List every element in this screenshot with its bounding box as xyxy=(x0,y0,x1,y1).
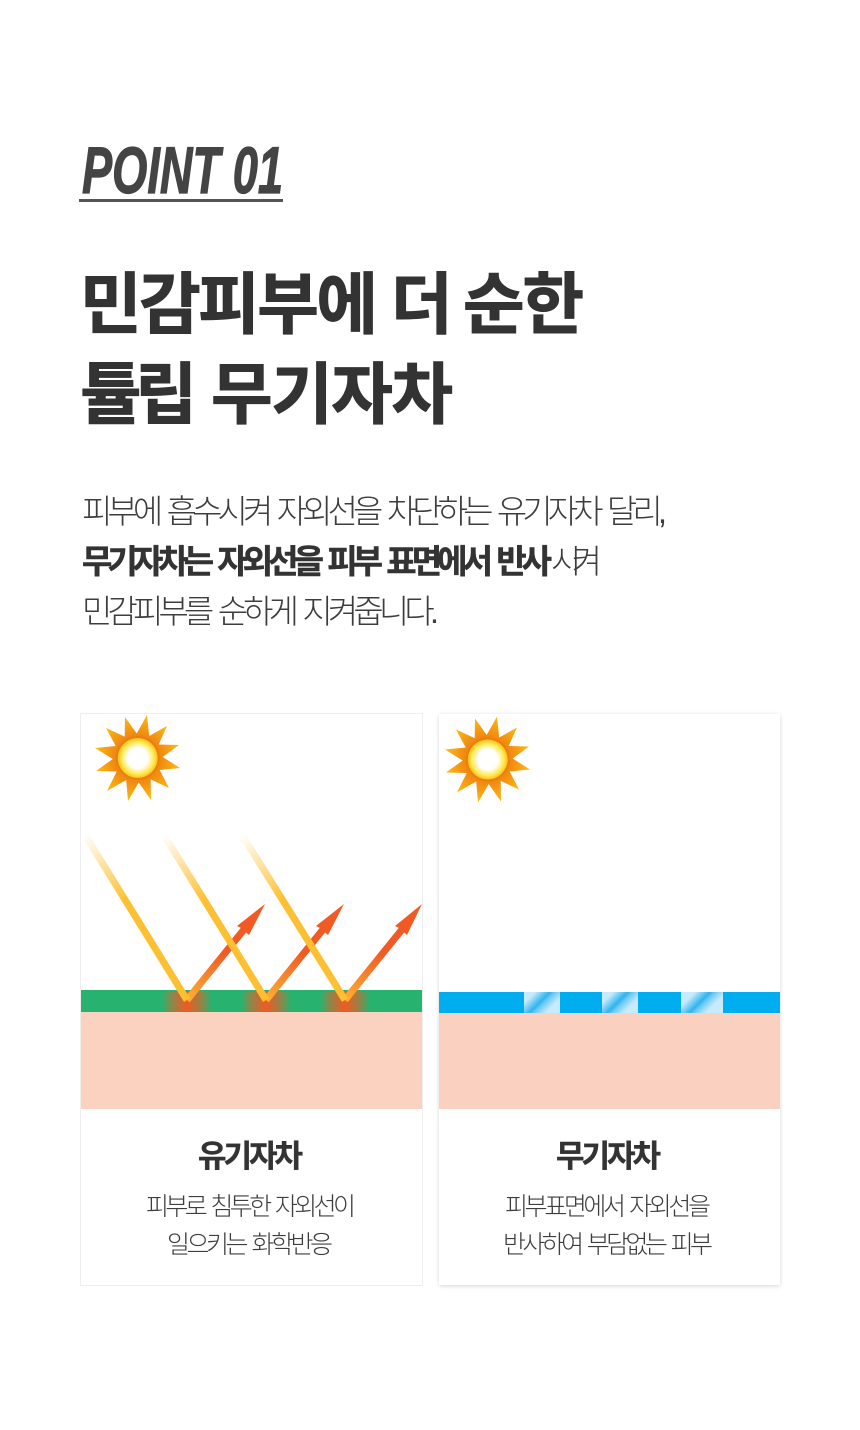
panel description: 반사하여 부담없는 피부 xyxy=(503,1231,713,1259)
blue reflective layer xyxy=(439,992,780,1013)
body text: 민감피부를 순하게 지켜줍니다. xyxy=(82,593,439,630)
icon: sun xyxy=(445,716,530,802)
green filter layer xyxy=(81,990,422,1012)
heading: 민감피부에 xyxy=(80,268,378,343)
reflected arrows xyxy=(187,904,422,1000)
panel description: 피부표면에서 자외선을 xyxy=(505,1193,711,1221)
heading xyxy=(80,268,584,433)
body text: 시켜 xyxy=(551,543,602,580)
body text xyxy=(82,493,667,630)
title: POINT 01 xyxy=(79,133,283,207)
panel description: 일으키는 화학반응 xyxy=(167,1231,333,1259)
heading: 더 xyxy=(391,268,453,343)
heading: 순한 xyxy=(463,268,584,343)
panel description xyxy=(146,1193,356,1259)
heading: 무기자차 xyxy=(211,358,453,433)
body text: 피부에 흡수시켜 자외선을 차단하는 유기자차 달리, xyxy=(82,493,667,530)
body text: 무기자차는 자외선을 피부 표면에서 반사 xyxy=(82,543,552,580)
incoming rays xyxy=(85,835,345,1000)
panel: organic sunscreen xyxy=(80,714,422,1286)
panel: mineral sunscreen xyxy=(439,714,780,1285)
panel title: 무기자차 xyxy=(556,1139,661,1174)
skin layer xyxy=(439,1013,780,1109)
panel description: 피부로 침투한 자외선이 xyxy=(146,1193,356,1221)
icon: sun xyxy=(95,715,180,801)
title: POINT 01: POINT 01 xyxy=(82,133,283,207)
panel description xyxy=(503,1193,713,1259)
heading: 튤립 xyxy=(80,358,197,433)
panel title: 유기자차 xyxy=(198,1139,303,1174)
skin layer xyxy=(81,1012,422,1109)
